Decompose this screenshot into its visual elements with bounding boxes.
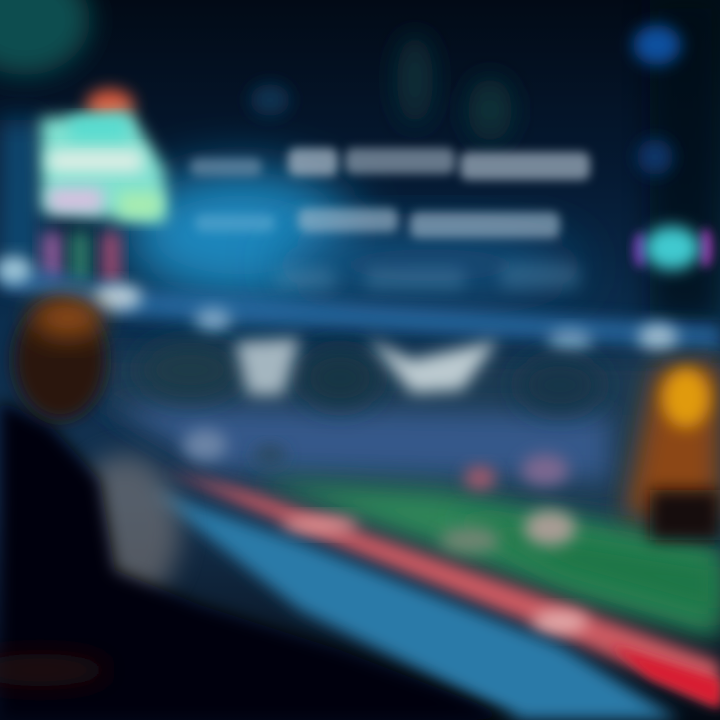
headline text block (blurred) <box>190 148 590 290</box>
field players <box>183 429 576 553</box>
lower stadium band <box>100 342 720 530</box>
background glows <box>0 0 720 320</box>
right side indicators <box>633 25 713 270</box>
white check shapes <box>235 338 498 395</box>
blue stripe <box>150 490 680 720</box>
pastel building icon <box>40 89 165 284</box>
horizontal light band <box>0 256 720 354</box>
red stripe <box>165 470 720 708</box>
foreground silhouette <box>0 298 520 720</box>
orange figure <box>625 362 720 540</box>
green field <box>250 480 720 640</box>
